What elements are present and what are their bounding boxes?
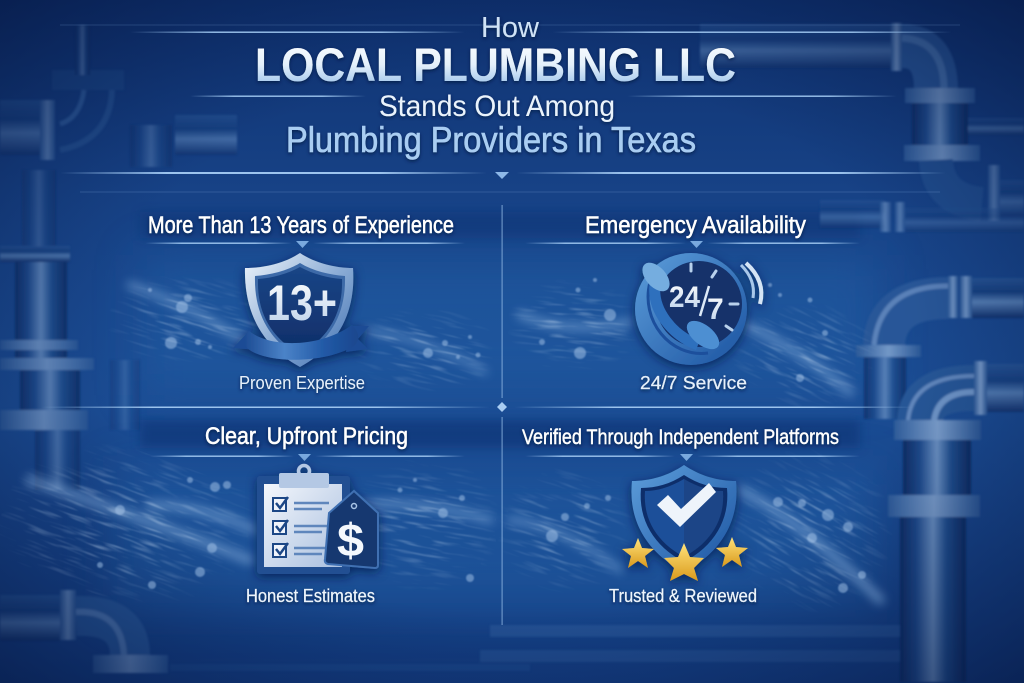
water spray texture: [4, 278, 888, 608]
heading: pricing: Clear, Upfront Pricing: [205, 423, 408, 450]
quadrant dividers: [40, 205, 914, 625]
header rules: [60, 24, 960, 192]
panel: experience: [145, 212, 465, 393]
heading rule: emergency: [525, 241, 860, 248]
heading: experience: More Than 13 Years of Experience: [148, 212, 454, 239]
icon: 24/7 phone clock: 7: [707, 293, 724, 326]
panel: verified: [522, 426, 860, 606]
panel: emergency: [525, 212, 860, 393]
caption: 24/7 service: 24/7 Service: [640, 373, 747, 393]
heading rule: pricing: [150, 454, 465, 461]
caption: trusted and reviewed: Trusted & Reviewed: [609, 586, 757, 606]
icon: 13+ shield with ribbon: 13+: [267, 275, 337, 331]
icon: clipboard and price tag: [257, 466, 378, 574]
caption: honest estimates: Honest Estimates: [246, 586, 375, 606]
pipes: top left: [0, 25, 237, 167]
caption: proven expertise: Proven Expertise: [239, 373, 365, 393]
heading rule: verified: [525, 454, 860, 461]
title line: stands out: Stands Out Among: [379, 90, 615, 123]
pipes: right elbow and column: [888, 361, 1024, 682]
title line: company name: LOCAL PLUMBING LLC: [255, 38, 736, 91]
pipes: bottom band: [170, 625, 900, 671]
heading: emergency: Emergency Availability: [585, 212, 806, 239]
title line: How: How: [481, 12, 540, 44]
heading rule: experience: [145, 241, 465, 248]
pipes: top right: [700, 23, 1024, 232]
icon: 24/7 phone clock: [635, 253, 761, 365]
icon: 13+ shield with ribbon: [233, 253, 369, 367]
pipes: right elbow middle: [856, 276, 1024, 419]
icon: 24/7 phone clock: 24: [669, 281, 700, 314]
pipes: bottom left: [0, 590, 168, 673]
title line: providers: Plumbing Providers in Texas: [286, 119, 696, 160]
title block: [255, 12, 736, 160]
panel: pricing: [150, 423, 465, 606]
icon: verified shield with stars: [622, 465, 748, 581]
icon: clipboard and price tag: $: [337, 514, 364, 566]
pipes: left column: [0, 170, 140, 490]
heading: verified: Verified Through Independent Platforms: [522, 426, 839, 449]
